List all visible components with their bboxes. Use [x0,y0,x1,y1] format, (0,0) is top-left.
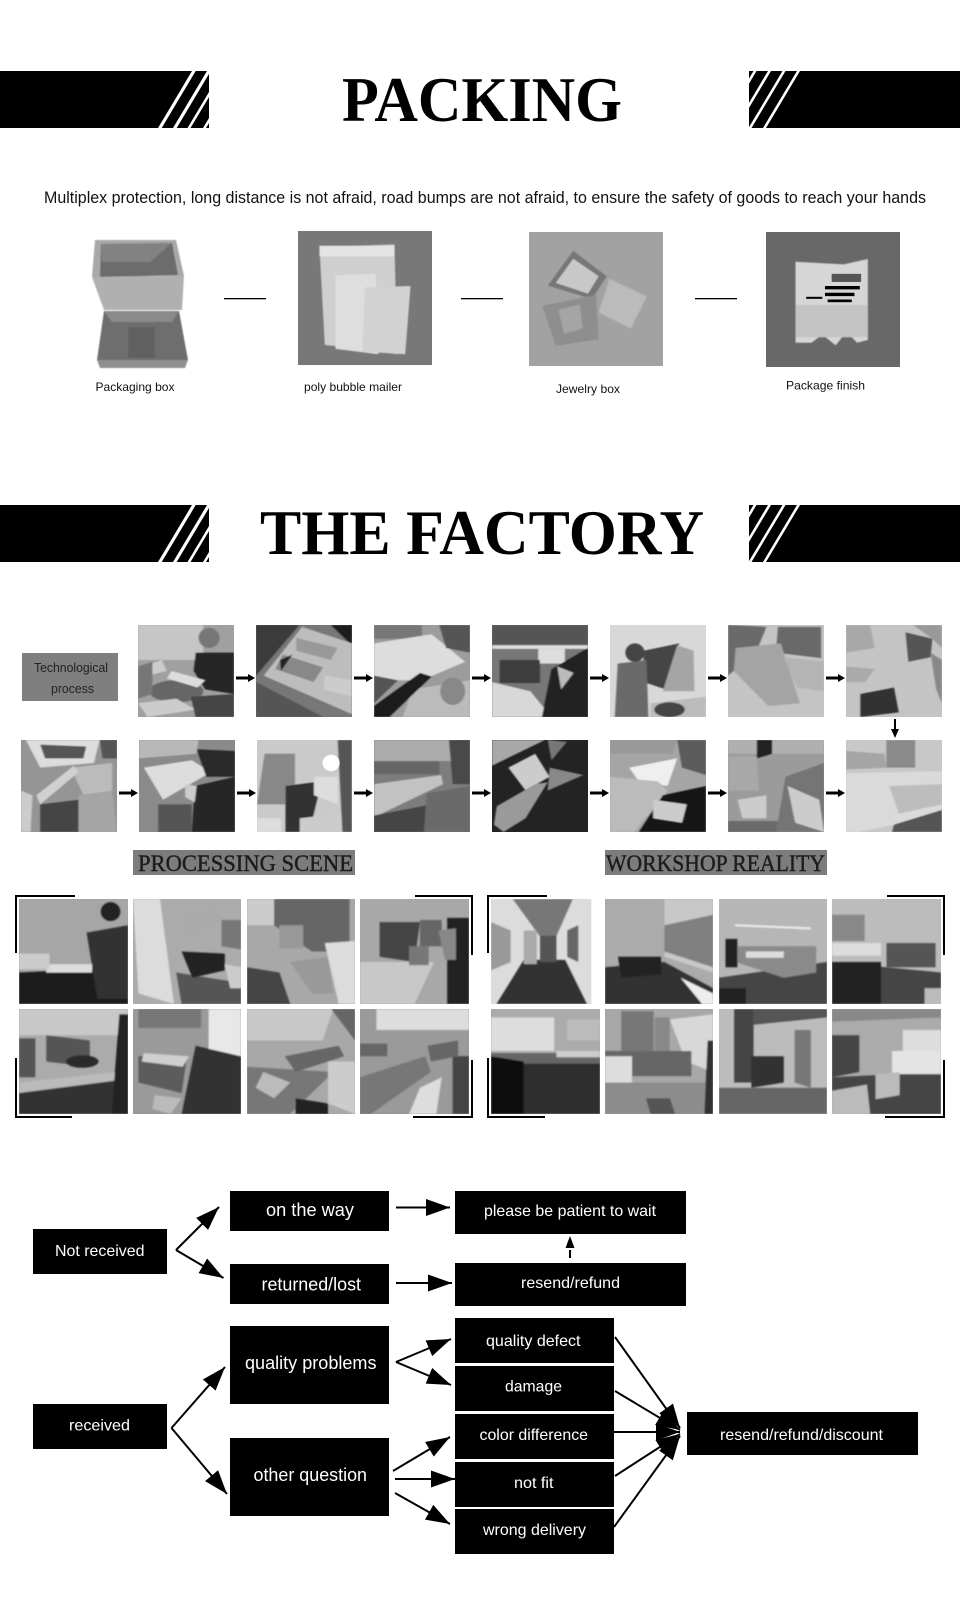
scene photo 3 [247,899,355,1004]
workshop photo 5 [491,1009,600,1114]
scene photo 2 [133,899,241,1004]
node: not fit: not fit [514,1475,554,1492]
scene photo 4 [360,899,469,1004]
section: after-sales flowchart [33,1191,918,1554]
workshop photo 6 [605,1009,713,1114]
right header bar [749,505,960,562]
title: the factory: THE FACTORY [260,497,704,568]
node: resend/refund/discount: resend/refund/discount [720,1427,884,1444]
node: other question: other question [254,1465,367,1485]
node: color difference: color difference [480,1427,588,1444]
node: returned/lost: returned/lost [262,1274,361,1294]
node: color difference [455,1414,614,1459]
process photo 3 [374,625,470,717]
label box: technological process: Technological [34,661,108,675]
process photo 4 [492,625,588,717]
workshop photo 7 [719,1009,827,1114]
node: quality defect [455,1318,614,1363]
label box: technological process [22,653,118,701]
workshop photo 3 [719,899,827,1004]
title: packing: PACKING [342,64,622,135]
photo: poly bubble mailer [298,231,432,365]
scene photo 1 [19,899,128,1004]
node: wrong delivery [455,1509,614,1554]
heading: processing scene: PROCESSING SCENE [138,851,353,876]
left header bar [0,505,209,562]
process photo 11 [374,740,470,832]
node: quality problems: quality problems [245,1353,376,1373]
node: on the way [230,1191,389,1231]
node: not fit [455,1462,614,1507]
heading: workshop reality: WORKSHOP REALITY [606,851,825,876]
node: resend/refund/discount [687,1412,918,1455]
node: returned/lost [230,1264,389,1304]
section: the factory [0,497,960,1117]
node: resend/refund [455,1263,686,1306]
corner brackets: workshop reality [488,896,944,1117]
process photo 2 [256,625,352,717]
connector dash 1 [224,298,266,299]
left header bar [0,71,209,128]
process photo 10 [257,740,352,832]
corner brackets: processing scene [16,896,472,1117]
photo: jewelry box [529,232,663,366]
node: not received: Not received [55,1243,144,1260]
process photo 6 [728,625,824,717]
label: poly bubble mailer: poly bubble mailer [304,380,402,394]
workshop photo 2 [605,899,713,1004]
node: please be patient to wait [455,1191,686,1234]
label: jewelry box: Jewelry box [556,382,620,396]
connector dash 3 [695,298,737,299]
process photo 12 [492,740,588,832]
photo: packaging box [92,240,188,368]
node: resend/refund: resend/refund [521,1275,620,1292]
node: not received [33,1229,167,1274]
node: on the way: on the way [266,1200,354,1220]
scene photo 5 [19,1009,128,1114]
node: damage: damage [505,1378,562,1396]
right header bar [749,71,960,128]
subtitle text: Multiplex protection, long distance is not afraid, road bumps are not afraid, to ensure the safety of goods to reach your hands [44,189,926,207]
scene photo 7 [247,1009,355,1114]
scene photo 8 [360,1009,469,1114]
process photo 14 [728,740,824,832]
node: received: received [69,1418,130,1434]
label box: technological process: process [51,682,94,696]
process photo 15 [846,740,942,832]
photo: package finish [766,232,900,367]
node: quality defect: quality defect [486,1333,581,1350]
node: other question [230,1438,389,1516]
section: packing [0,64,960,396]
workshop photo 1 [491,899,592,1004]
node: wrong delivery: wrong delivery [482,1522,586,1539]
process photo 9 [139,740,235,832]
process arrows [119,674,899,797]
process photo 1 [138,625,234,717]
node: damage [455,1366,614,1411]
label: packaging box: Packaging box [96,380,174,394]
workshop photo 8 [832,1009,941,1114]
connector dash 2 [461,298,503,299]
label: package finish: Package finish [786,378,865,392]
scene photo 6 [133,1009,241,1114]
process photo 7 [846,625,942,717]
process photo 8 [21,740,117,832]
process photo 13 [610,740,706,832]
process photo 5 [610,625,706,717]
node: received [33,1404,167,1449]
flow arrows [172,1207,680,1527]
workshop photo 4 [832,899,941,1004]
node: please be patient to wait: please be patient to wait [484,1203,657,1220]
node: quality problems [230,1326,389,1404]
